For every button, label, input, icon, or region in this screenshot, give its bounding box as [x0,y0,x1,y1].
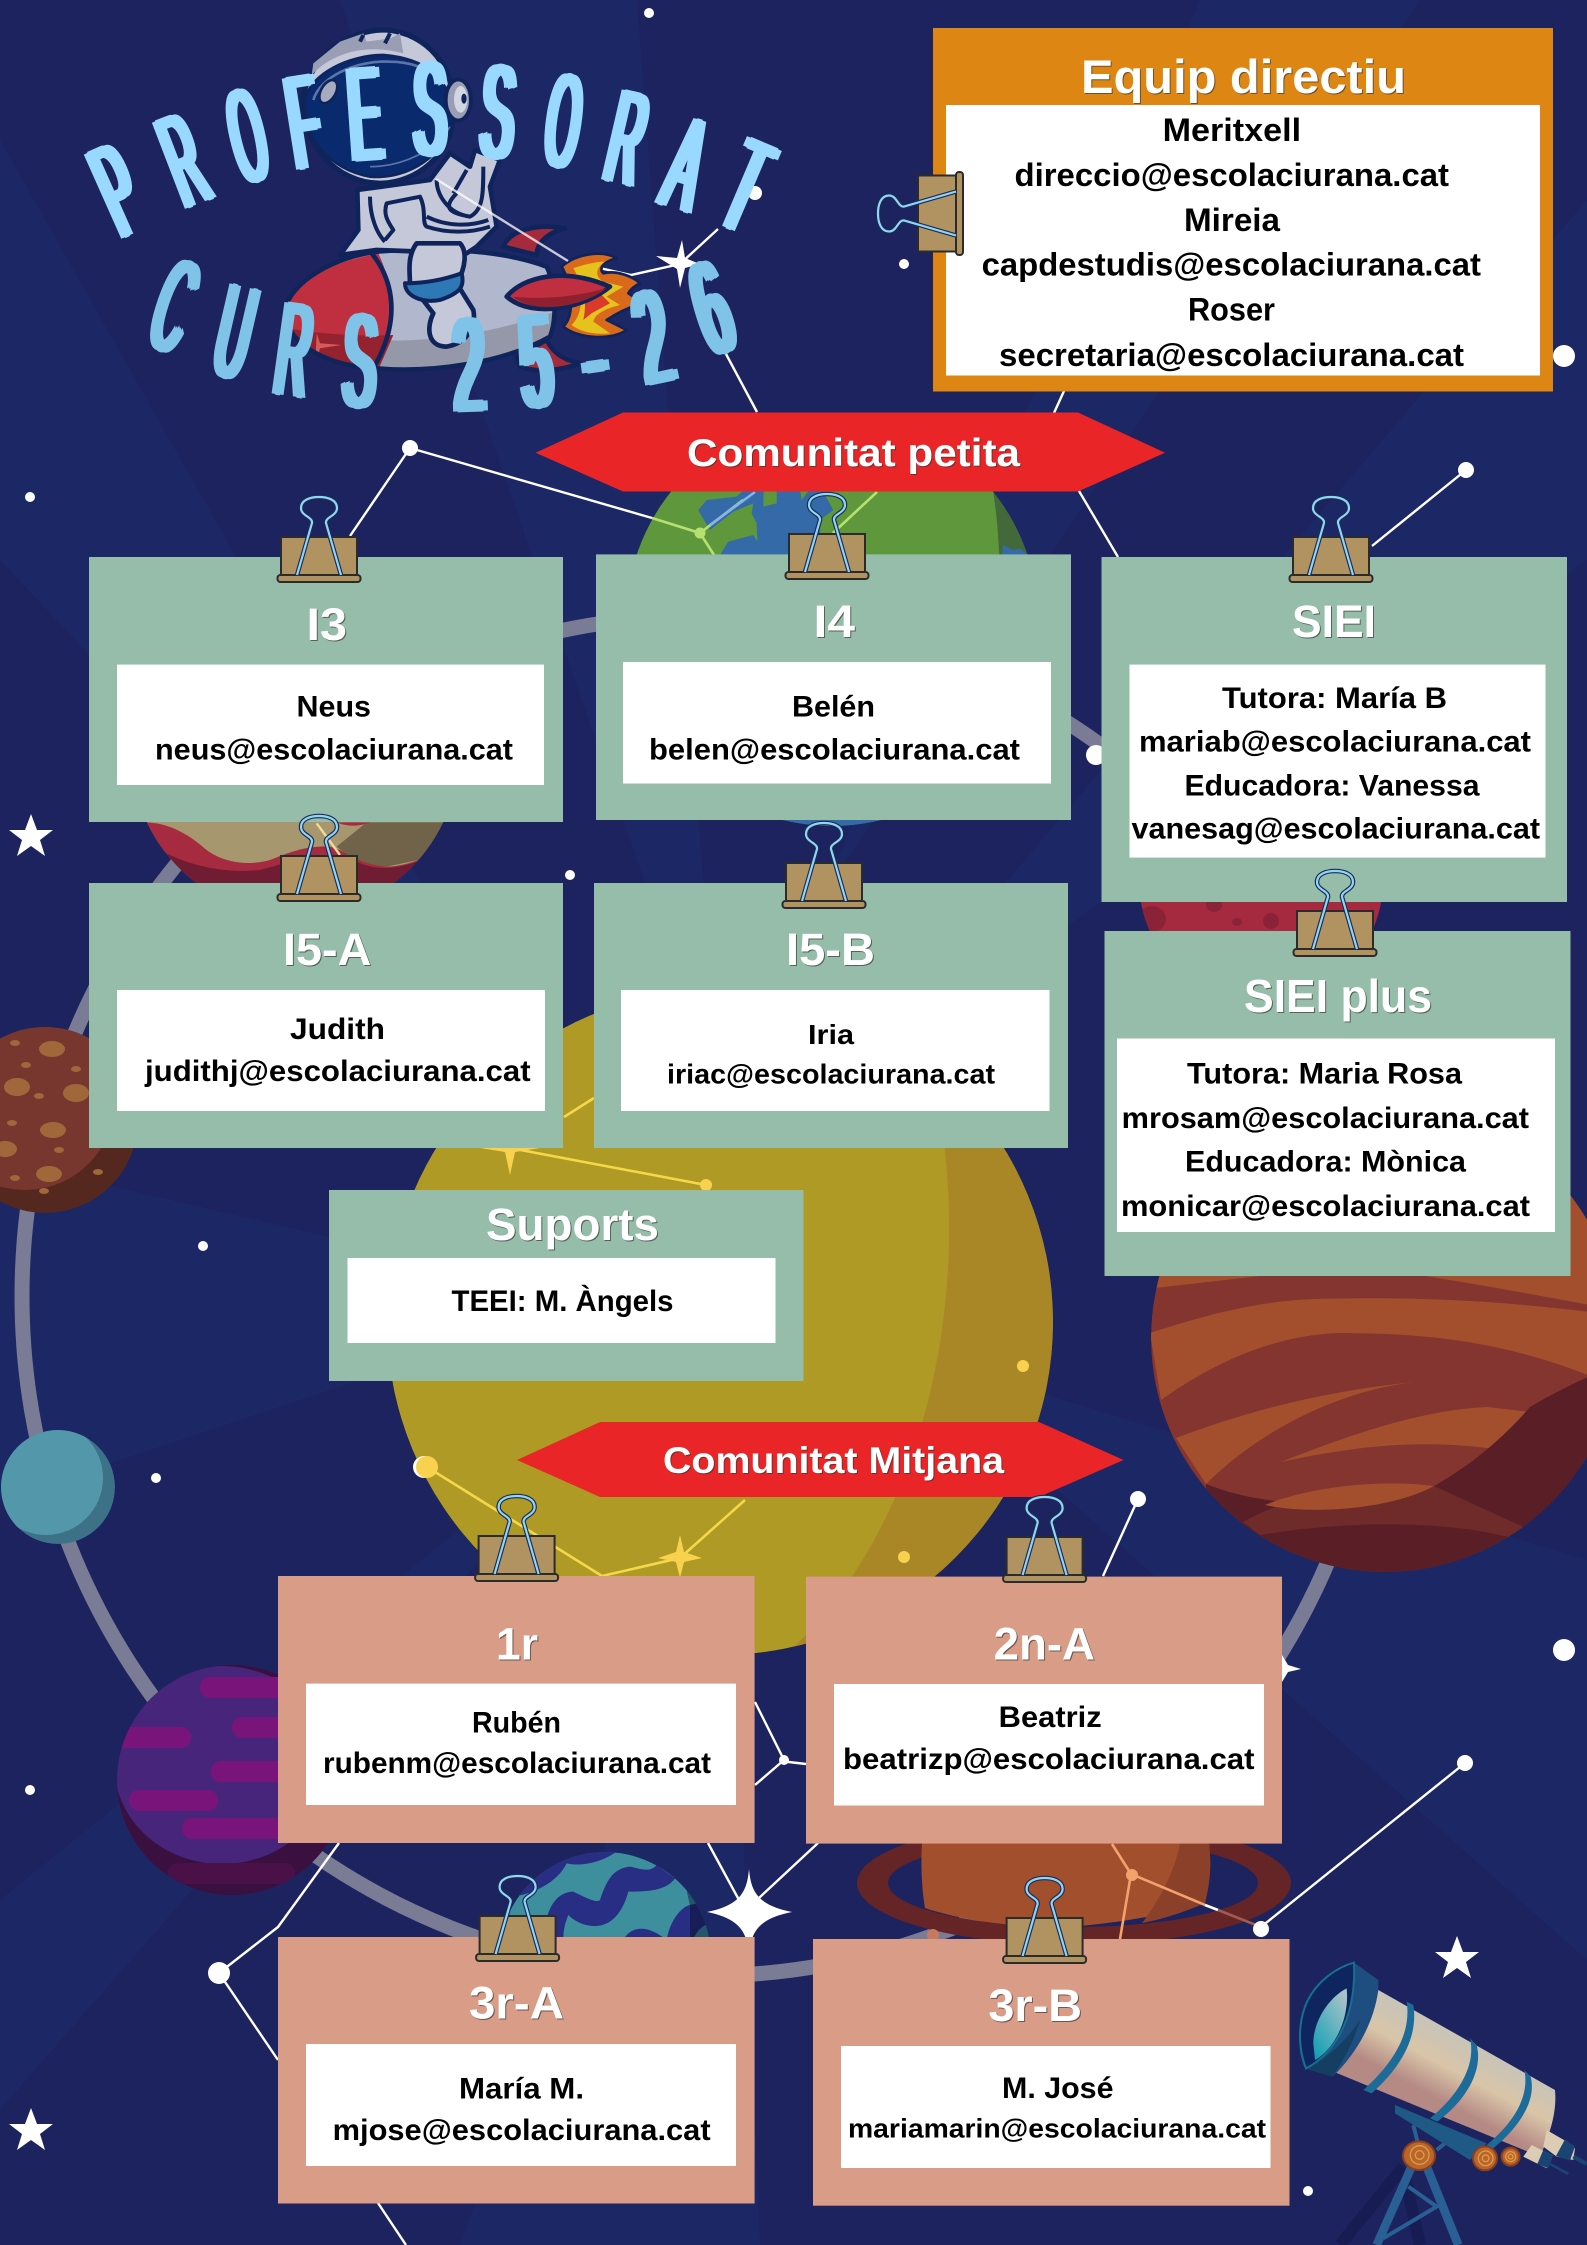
title: professorat curs 25-26: U [203,256,267,409]
banner: comunitat mitjana: Comunitat Mitjana [663,1440,1004,1481]
contact list: capdestudis@escolaciurana.cat [982,247,1481,283]
contact: SIEI [1132,682,1540,846]
panel: I5-A [89,883,563,1148]
panel: 2n-A [806,1577,1282,1844]
title: professorat curs 25-26: R [268,275,320,427]
planet: earth [636,492,1028,826]
contact: Beatriz [843,1701,1254,1776]
title: professorat curs 25-26: S [477,37,519,188]
contact list: Roser [1188,292,1275,328]
title: professorat curs 25-26: 2 [451,291,487,440]
contact list: direccio@escolaciurana.cat [1014,157,1449,193]
contact list [982,112,1481,373]
planet: wavy teal [509,1852,709,1937]
contact: Judith: Judith [290,1013,385,1046]
title: professorat curs 25-26: F [278,47,330,198]
heading: Suports: Suports [486,1199,659,1250]
title: professorat curs 25-26: R [595,62,659,215]
contact: Iria [667,1019,995,1090]
contact: Iria: Iria [808,1019,854,1050]
contact: Beatriz: beatrizp@escolaciurana.cat [843,1743,1254,1776]
panel: SIEI [1102,557,1567,902]
contact: Belén: belen@escolaciurana.cat [649,734,1020,766]
planet: teal [0,1421,115,1544]
title: professorat curs 25-26: - [573,281,615,432]
contact: SIEI: Educadora: Vanessa [1184,770,1480,802]
contact: Rubén [323,1707,711,1780]
title: professorat curs 25-26: A [649,89,723,240]
contact: SIEI plus: Tutora: Maria Rosa [1187,1058,1462,1090]
contact: Neus: Neus [296,690,371,724]
illustration: telescope [1299,1963,1587,2245]
title: professorat curs 25-26: 5 [516,286,556,437]
heading: I3: I3 [306,599,347,650]
contact: Neus [155,690,513,766]
contact: Rubén: rubenm@escolaciurana.cat [323,1747,711,1780]
panel: SIEI plus [1104,931,1570,1276]
banner: comunitat petita: Comunitat petita [687,432,1020,475]
contact: Neus: neus@escolaciurana.cat [155,734,513,766]
contact: SIEI: vanesag@escolaciurana.cat [1132,812,1540,846]
panel: I5-B [594,883,1068,1148]
panel: I3 [89,557,563,822]
binder clips on cards [278,494,1376,1963]
title: professorat curs 25-26: P [73,116,163,265]
contact list: Meritxell [1163,112,1301,148]
yellow dots and stars [416,528,1138,1881]
contact: Rubén: Rubén [472,1707,561,1740]
constellation lines [219,229,1466,2245]
orbit ring [22,616,1382,1976]
panel: 3r-A [278,1937,755,2204]
planet: red banded [146,822,444,883]
title: professorat curs 25-26: O [215,60,280,213]
contact: SIEI: mariab@escolaciurana.cat [1139,726,1531,758]
planet: striped [1151,1196,1587,1572]
contact: María M.: mjose@escolaciurana.cat [333,2114,711,2147]
title: professorat curs 25-26: S [340,286,380,437]
heading: I5-B: I5-B [786,924,875,975]
contact: M. José [848,2072,1266,2144]
contact: Judith: judithj@escolaciurana.cat [144,1055,531,1088]
contact: SIEI plus: mrosam@escolaciurana.cat [1122,1102,1529,1135]
heading: 3r-B: 3r-B [988,1980,1082,2031]
title: professorat curs 25-26: T [703,112,790,261]
contact: María M. [333,2073,711,2147]
planet: purple [117,1665,328,1895]
contact: SIEI plus: Educadora: Mònica [1185,1146,1466,1178]
heading: equip directiu: Equip directiu [1081,50,1406,103]
panel: I4 [596,554,1071,820]
coloured constellation lines over planets [427,492,1261,1939]
contact: Beatriz: Beatriz [999,1701,1102,1734]
contact: Belén: Belén [792,690,875,724]
heading: I4: I4 [814,596,855,647]
planet: crimson spotted [1141,902,1381,931]
planet: big yellow [392,1014,1053,1654]
contact list: secretaria@escolaciurana.cat [999,337,1464,373]
icon: binder clip on equip directiu [878,172,963,255]
heading: 1r: 1r [496,1619,538,1670]
heading: SIEI plus: SIEI plus [1244,970,1432,1022]
constellation line over astronaut [436,179,568,261]
contact: SIEI plus: monicar@escolaciurana.cat [1121,1190,1530,1223]
contact: TEEI: TEEI: M. Àngels [452,1284,674,1318]
banner: comunitat petita [536,412,1165,492]
panel: equip directiu [933,28,1553,392]
heading: 2n-A: 2n-A [994,1619,1095,1670]
contact: M. José: mariamarin@escolaciurana.cat [848,2114,1266,2144]
title: professorat curs 25-26 [73,35,790,440]
panel: 3r-B [813,1939,1290,2206]
contact: M. José: M. José [1002,2072,1114,2105]
planet: brown spotted [0,1027,134,1213]
contact: Iria: iriac@escolaciurana.cat [667,1058,995,1090]
contact: Judith [144,1013,531,1088]
contact: SIEI plus [1121,1058,1530,1223]
panel: Suports [329,1190,804,1381]
heading: SIEI: SIEI [1292,596,1376,647]
illustration: astronaut on rocket [280,30,643,373]
contact list: Mireia [1184,202,1280,238]
banner: comunitat mitjana [517,1422,1124,1497]
contact: SIEI: Tutora: María B [1222,682,1447,715]
contact: María M.: María M. [459,2073,584,2106]
heading: I5-A: I5-A [283,924,371,975]
title: professorat curs 25-26: O [537,46,590,198]
title: professorat curs 25-26: S [414,35,446,184]
title: professorat curs 25-26: 2 [622,261,683,414]
panel: 1r [278,1576,755,1843]
contact: Belén [649,690,1020,766]
title: professorat curs 25-26: E [344,39,386,190]
title: professorat curs 25-26: R [142,85,225,236]
title: professorat curs 25-26: 6 [675,233,748,384]
planet: ringed orange [857,1821,1291,1945]
heading: 3r-A: 3r-A [469,1978,564,2029]
title: professorat curs 25-26: C [135,231,214,382]
